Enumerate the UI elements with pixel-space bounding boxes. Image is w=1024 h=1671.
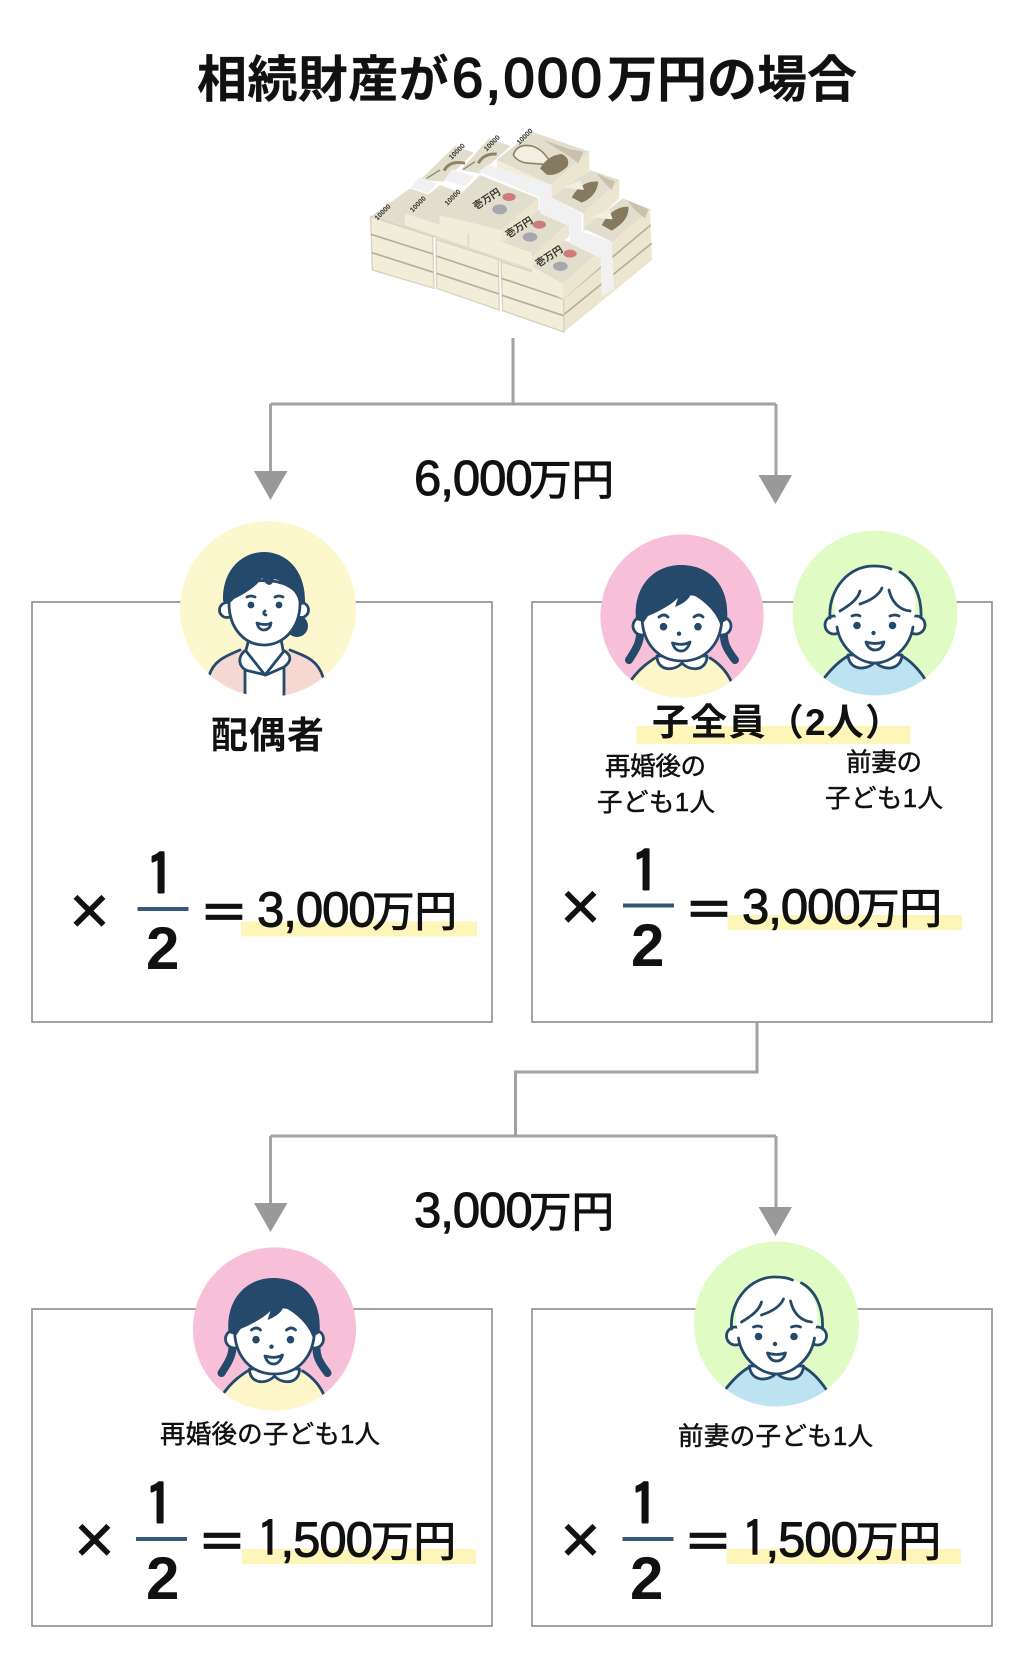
icon: spouse avatar [180, 521, 356, 709]
band on back notes [411, 169, 474, 193]
middle notes with seals: 10000 [516, 128, 535, 146]
formula: 3,000 [257, 884, 375, 938]
third portrait note [583, 198, 651, 242]
illustration: stacked bank notes [371, 128, 652, 332]
formula [69, 845, 457, 982]
highlight [636, 726, 910, 744]
title: 万円の場合 [607, 52, 857, 108]
icon: girl avatar [600, 534, 764, 706]
amount: 6,000万円: 6,000 [414, 452, 532, 506]
label: child of former wife: 前妻の [846, 749, 922, 777]
label: child of former wife: 子ども1人 [825, 785, 943, 813]
heading: all children: 子全員（2人） [652, 702, 902, 743]
formula: × [560, 1500, 601, 1578]
formula: 万円 [856, 1520, 941, 1566]
connector: children to split [270, 1022, 776, 1212]
top-back note with portrait [497, 132, 589, 203]
middle notes with seals: 10000 [374, 203, 393, 222]
middle notes with seals: 壱万円 [471, 185, 503, 213]
formula: 2 [146, 915, 179, 982]
arrow: left lower [254, 1203, 288, 1232]
formula: 1 [257, 1514, 280, 1562]
middle notes with seals [374, 128, 601, 299]
title: 相続財産が [197, 52, 449, 108]
label: 前妻の子ども1人 [678, 1423, 873, 1451]
base tier: right side [563, 208, 652, 332]
formula: × [69, 871, 110, 949]
middle notes with seals: 10000 [483, 134, 502, 153]
formula: × [74, 1500, 115, 1578]
formula: 1 [630, 1475, 658, 1532]
label: child after remarriage: 再婚後の [605, 753, 706, 781]
highlight [728, 915, 962, 930]
formula: ＝ [684, 1517, 732, 1570]
middle notes with seals: 壱万円 [503, 214, 535, 241]
formula: ＝ [198, 1517, 246, 1570]
arrow: right top [758, 475, 792, 504]
amount: 3,000万円: 万円 [529, 1190, 614, 1237]
highlight [242, 1549, 476, 1564]
panel: spouse [32, 521, 492, 1022]
arrow: right lower [758, 1207, 792, 1236]
icon: girl avatar [193, 1247, 356, 1419]
formula [560, 842, 942, 979]
formula: 1 [631, 842, 660, 899]
formula: × [560, 867, 601, 945]
formula: ,500 [280, 1514, 372, 1568]
highlight [726, 1549, 961, 1564]
label: child after remarriage: 子ども1人 [597, 789, 715, 817]
formula: ＝ [200, 888, 248, 941]
middle notes with seals: 10000 [448, 143, 467, 161]
formula: ＝ [685, 885, 733, 938]
highlight [241, 922, 477, 936]
panel: child of former wife [532, 1242, 992, 1626]
formula: ,500 [766, 1514, 857, 1568]
formula: 1 [146, 845, 174, 902]
formula [74, 1475, 456, 1612]
panel: all children [532, 530, 992, 1022]
middle notes with seals: 壱万円 [533, 243, 565, 270]
amount: 3,000万円: 3,000 [414, 1184, 532, 1238]
arrow: left top [254, 471, 288, 500]
formula: 2 [630, 1545, 663, 1612]
icon: boy avatar [694, 1242, 859, 1414]
connector: top split [270, 338, 776, 480]
middle notes with seals: 10000 [444, 189, 463, 207]
middle notes with seals: 10000 [409, 195, 428, 214]
formula: 万円 [372, 890, 457, 936]
formula: 2 [631, 912, 664, 979]
white paper band [478, 164, 614, 297]
heading: spouse: 配偶者 [211, 715, 324, 756]
title: 6,000 [452, 46, 604, 109]
label: child after remarriage [597, 753, 715, 817]
second portrait note [552, 170, 619, 232]
amount: 6,000万円: 万円 [529, 458, 614, 505]
formula: 1 [742, 1514, 766, 1562]
formula [560, 1475, 941, 1612]
formula: 2 [146, 1545, 179, 1612]
label: child of former wife [825, 749, 943, 813]
label: 再婚後の子ども1人 [160, 1421, 380, 1449]
back-left notes [420, 138, 511, 182]
formula: 万円 [371, 1520, 456, 1566]
base tier: front faces [371, 217, 564, 332]
formula: 万円 [857, 886, 942, 934]
base tier: top surface [371, 188, 573, 283]
panel: child after remarriage [32, 1247, 492, 1626]
formula: 1 [145, 1475, 174, 1532]
formula: 3,000 [742, 880, 860, 934]
icon: boy avatar [792, 530, 958, 703]
